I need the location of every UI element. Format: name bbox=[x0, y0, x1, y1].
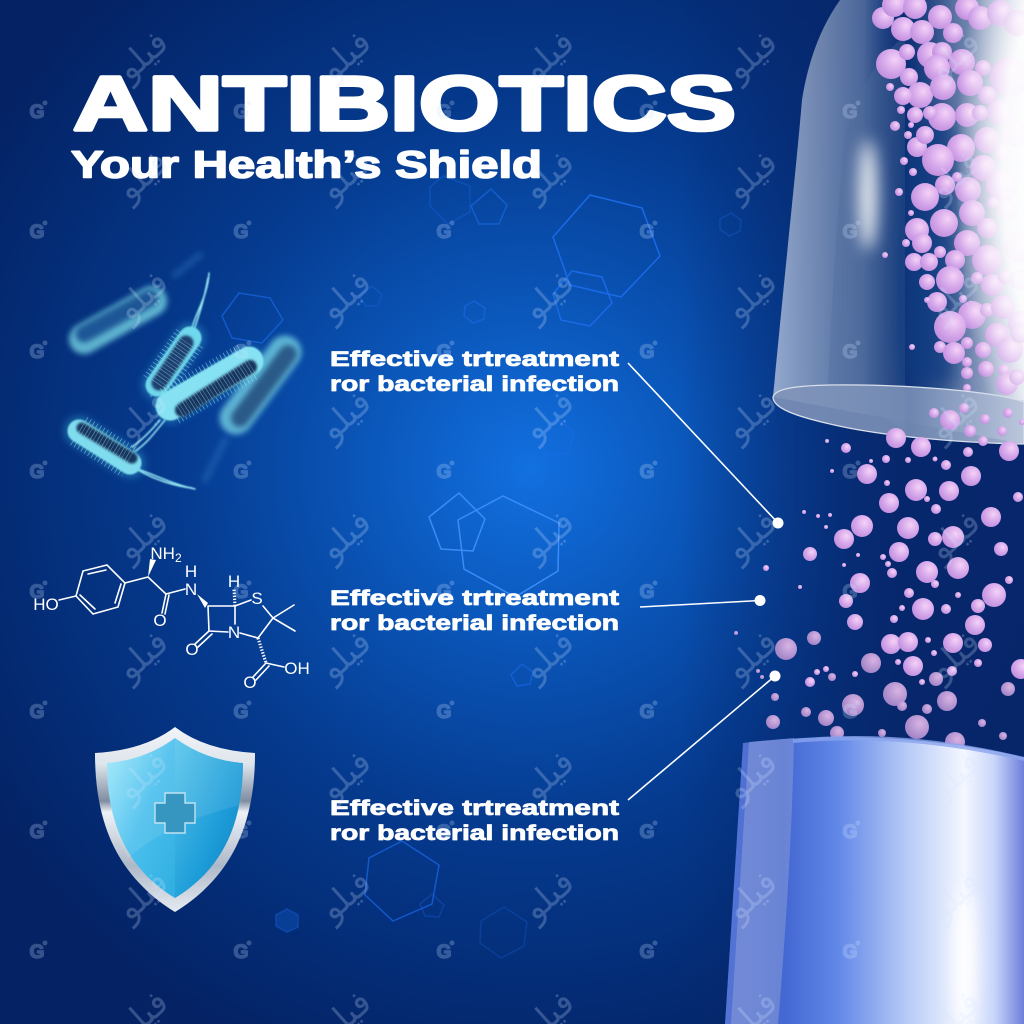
watermark: arabic word: فيلو bbox=[107, 502, 177, 571]
watermark: arabic word: فيلو bbox=[513, 22, 583, 91]
watermark: G logo marks: G bbox=[437, 822, 451, 843]
watermark: arabic word: فيلو bbox=[919, 382, 989, 451]
callout text 1: ror bacterial infection bbox=[330, 373, 619, 396]
watermark: arabic word: فيلو bbox=[716, 142, 786, 211]
callout text 2: ror bacterial infection bbox=[330, 612, 619, 635]
capsule bright wash bbox=[950, 0, 1024, 400]
lower shell rim bbox=[793, 736, 1024, 761]
bacterium glow bbox=[79, 338, 249, 463]
watermark: G logo marks: G bbox=[30, 702, 44, 723]
watermark: arabic word: فيلو bbox=[716, 742, 786, 811]
watermark: arabic word: فيلو bbox=[310, 742, 380, 811]
background right dark fade bbox=[680, 0, 1024, 1024]
watermark: arabic word: فيلو bbox=[310, 22, 380, 91]
molecule atom labels: N bbox=[228, 623, 240, 642]
callout text 3: Effective trtreatment bbox=[330, 797, 619, 820]
watermark: G logo marks: G bbox=[843, 702, 857, 723]
watermark: arabic word: فيلو bbox=[513, 742, 583, 811]
watermark: G logo marks: G bbox=[640, 822, 654, 843]
callout text 1: Effective trtreatment bbox=[330, 348, 619, 371]
watermark: arabic word: فيلو bbox=[919, 862, 989, 931]
watermark: G logo marks: G bbox=[640, 222, 654, 243]
molecule atom labels: HO bbox=[33, 595, 59, 614]
molecule atom labels: O bbox=[153, 611, 167, 630]
blurred bacterium right bbox=[236, 352, 288, 418]
dark gap behind granules bbox=[901, 120, 955, 385]
illustration: bacteria bbox=[79, 255, 288, 489]
watermark: arabic word: فيلو bbox=[716, 502, 786, 571]
watermark: G logo marks: G bbox=[640, 462, 654, 483]
watermark: G logo marks: G bbox=[843, 102, 857, 123]
watermark: G logo marks: G bbox=[234, 822, 248, 843]
watermark: G logo marks: G bbox=[640, 582, 654, 603]
bacterium middle bbox=[170, 361, 251, 411]
watermark: G logo marks: G bbox=[640, 342, 654, 363]
watermark: G logo marks: G bbox=[843, 222, 857, 243]
watermark: G logo marks: G bbox=[437, 942, 451, 963]
watermark: G logo marks: G bbox=[30, 942, 44, 963]
lower dim particles bbox=[734, 631, 1015, 752]
dome highlight bbox=[859, 140, 877, 250]
capsule top opening rim bbox=[773, 385, 1024, 444]
watermark: G logo marks: G bbox=[437, 222, 451, 243]
watermark: arabic word: فيلو bbox=[919, 742, 989, 811]
molecule atom labels bbox=[33, 544, 310, 692]
watermark: G logo marks bbox=[30, 102, 858, 963]
bacterium upper bbox=[157, 338, 190, 385]
shield cross bbox=[155, 793, 195, 833]
shield right face bbox=[175, 738, 243, 898]
watermark: G logo marks: G bbox=[234, 342, 248, 363]
watermark: G logo marks: G bbox=[437, 342, 451, 363]
molecule wedges bbox=[148, 559, 208, 608]
subtitle: Your Health’s Shield bbox=[71, 144, 542, 186]
illustration: shield bbox=[95, 727, 255, 912]
watermark: arabic word: فيلو bbox=[107, 742, 177, 811]
watermark: G logo marks: G bbox=[437, 102, 451, 123]
watermark: G logo marks: G bbox=[437, 582, 451, 603]
falling particles bbox=[763, 403, 1024, 687]
watermark: G logo marks: G bbox=[640, 942, 654, 963]
watermark: G logo marks: G bbox=[843, 942, 857, 963]
watermark: arabic word: فيلو bbox=[716, 382, 786, 451]
watermark: arabic word: فيلو bbox=[513, 382, 583, 451]
leader line 1 bbox=[628, 363, 784, 528]
shield metal frame bbox=[95, 727, 255, 912]
watermark: G logo marks: G bbox=[437, 702, 451, 723]
watermark: G logo marks: G bbox=[843, 462, 857, 483]
watermark: arabic word: فيلو bbox=[310, 502, 380, 571]
watermark: arabic word: فيلو bbox=[919, 22, 989, 91]
callout text 1 bbox=[330, 348, 619, 396]
illustration: amoxicillin molecule bbox=[33, 544, 310, 692]
watermark: arabic word: فيلو bbox=[716, 862, 786, 931]
watermark: G logo marks: G bbox=[640, 102, 654, 123]
watermark: G logo marks: G bbox=[30, 222, 44, 243]
molecule atom labels: N bbox=[185, 580, 197, 599]
watermark: G logo marks: G bbox=[30, 342, 44, 363]
watermark: G logo marks: G bbox=[234, 102, 248, 123]
faint tails bbox=[175, 255, 225, 480]
watermark: arabic word: فيلو bbox=[310, 862, 380, 931]
dome inner shade bbox=[828, 40, 905, 430]
shield left face bbox=[107, 738, 175, 898]
watermark: G logo marks: G bbox=[843, 342, 857, 363]
watermark: arabic word: فيلو bbox=[310, 622, 380, 691]
molecule atom labels: NH bbox=[150, 544, 175, 563]
molecule atom labels: H bbox=[185, 562, 197, 581]
molecule atom labels: O bbox=[243, 673, 257, 692]
watermark: G logo marks: G bbox=[30, 462, 44, 483]
watermark: arabic word: فيلو bbox=[107, 622, 177, 691]
molecule atom labels: S bbox=[251, 589, 263, 608]
lower shell left strip bbox=[731, 738, 794, 1024]
watermark: G logo marks: G bbox=[640, 702, 654, 723]
capsule top shell bbox=[773, 0, 1024, 444]
molecule atom labels: H bbox=[228, 572, 240, 591]
molecule atom labels: 2 bbox=[175, 551, 182, 565]
molecule atom labels: O bbox=[185, 640, 199, 659]
bacterium lower bbox=[79, 428, 132, 463]
callout text 3 bbox=[330, 797, 619, 845]
watermark: arabic word: فيلو bbox=[919, 262, 989, 331]
dome glass bbox=[773, 0, 1024, 444]
watermark: G logo marks: G bbox=[30, 822, 44, 843]
watermark: arabic word: فيلو bbox=[513, 142, 583, 211]
watermark: G logo marks: G bbox=[234, 222, 248, 243]
watermark: G logo marks: G bbox=[234, 702, 248, 723]
granules inside capsule bbox=[872, 0, 1024, 395]
leader line 3 bbox=[628, 670, 780, 800]
shield sheen bbox=[107, 738, 243, 858]
watermark: arabic word: فيلو bbox=[716, 622, 786, 691]
watermark: arabic word: فيلو bbox=[310, 142, 380, 211]
watermark: G logo marks: G bbox=[843, 822, 857, 843]
watermark: arabic word: فيلو bbox=[513, 862, 583, 931]
watermark: arabic word: فيلو bbox=[919, 502, 989, 571]
callout text 2 bbox=[330, 587, 619, 635]
watermark: arabic word: فيلو bbox=[513, 502, 583, 571]
watermark: arabic word: فيلو bbox=[513, 262, 583, 331]
watermark: G logo marks: G bbox=[30, 102, 44, 123]
watermark: G logo marks: G bbox=[30, 582, 44, 603]
background hexagons bbox=[222, 176, 741, 958]
blurred bacterium top bbox=[84, 298, 152, 339]
watermark: arabic word: فيلو bbox=[107, 142, 177, 211]
lower shell highlight bbox=[955, 890, 975, 1024]
watermark: arabic word: فيلو bbox=[513, 622, 583, 691]
watermark: arabic word: فيلو bbox=[107, 862, 177, 931]
molecule bonds bbox=[59, 565, 295, 680]
flagella bbox=[132, 273, 209, 489]
watermark: arabic word: فيلو bbox=[107, 262, 177, 331]
callout text 3: ror bacterial infection bbox=[330, 822, 619, 845]
callout text 2: Effective trtreatment bbox=[330, 587, 619, 610]
watermark: arabic word: فيلو bbox=[716, 262, 786, 331]
title: ANTIBIOTICS: ANTIBIOTICS bbox=[73, 61, 736, 147]
watermark: arabic word: فيلو bbox=[919, 142, 989, 211]
watermark: G logo marks: G bbox=[843, 582, 857, 603]
leader line 2 bbox=[640, 595, 766, 607]
watermark: arabic word: فيلو bbox=[310, 382, 380, 451]
watermark: arabic word: فيلو bbox=[310, 262, 380, 331]
watermark: G logo marks: G bbox=[234, 462, 248, 483]
watermark: arabic word: فيلو bbox=[716, 22, 786, 91]
title block bbox=[71, 61, 736, 186]
lower shell body bbox=[725, 737, 1024, 1024]
watermark: G logo marks: G bbox=[234, 582, 248, 603]
watermark: arabic word: فيلو bbox=[919, 622, 989, 691]
watermark: arabic word: فيلو bbox=[107, 382, 177, 451]
molecule atom labels: OH bbox=[284, 659, 310, 678]
watermark: G logo marks: G bbox=[234, 942, 248, 963]
capsule bottom shell bbox=[725, 736, 1024, 1024]
watermark: arabic word: فيلو bbox=[107, 22, 177, 91]
watermark: G logo marks: G bbox=[437, 462, 451, 483]
